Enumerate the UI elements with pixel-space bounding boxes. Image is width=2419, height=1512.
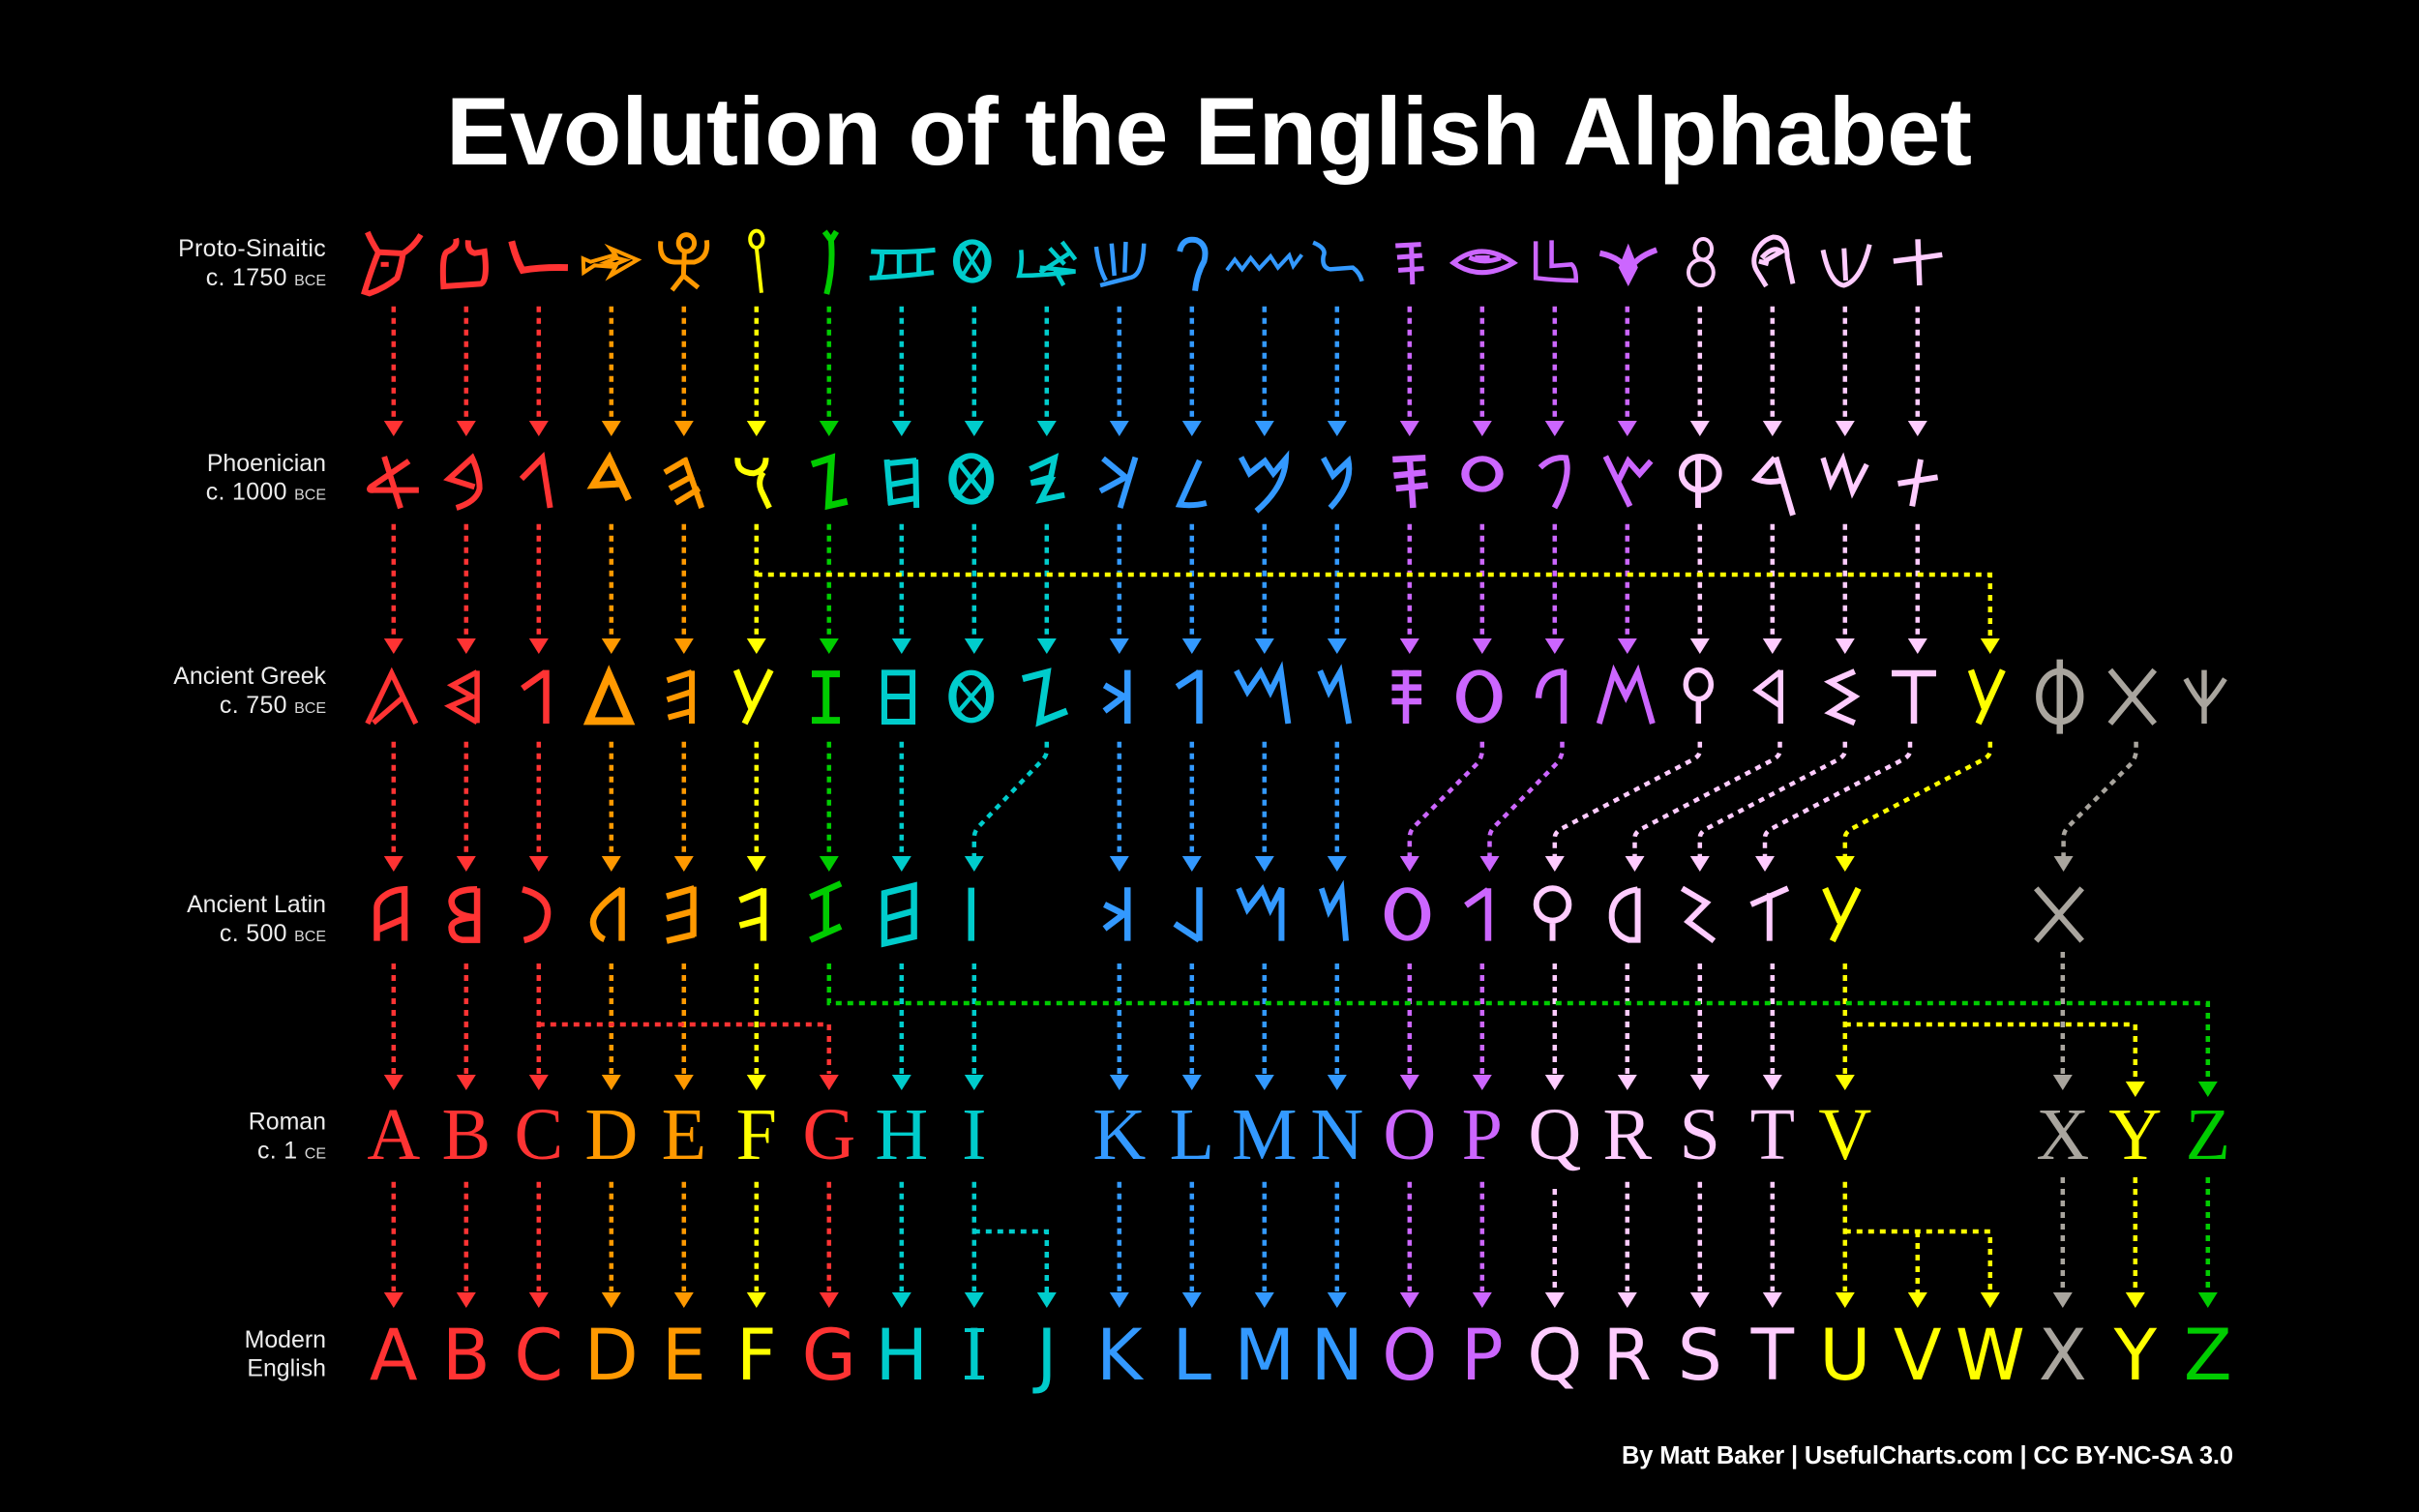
glyph: iota — [1023, 672, 1067, 722]
letter S: S — [1678, 1316, 1722, 1397]
letter H: H — [875, 1316, 928, 1397]
letter G: G — [802, 1316, 856, 1397]
arrow L — [1182, 1182, 1202, 1308]
arrow X — [2054, 742, 2136, 872]
label: Ancient Latin: Ancient Latin — [187, 891, 326, 918]
glyph: O — [1385, 887, 1430, 941]
glyph: cord — [1688, 239, 1714, 285]
letter I: I — [962, 1094, 986, 1175]
arrow C — [529, 1182, 549, 1308]
arrow Q — [1690, 524, 1710, 654]
arrows: Ancient Latin to Roman — [384, 952, 2218, 1097]
glyph: cross — [1894, 239, 1942, 285]
glyph: beta — [450, 670, 477, 723]
glyph: pe — [1540, 458, 1568, 508]
glyph: digamma — [736, 670, 771, 724]
glyph: delta — [589, 674, 629, 721]
arrow A — [384, 964, 403, 1090]
glyph: H — [884, 886, 914, 943]
glyph: R — [1612, 888, 1638, 940]
label: Ancient Latin: c. 500 BCE — [220, 920, 326, 947]
glyph: yodh — [1030, 458, 1064, 500]
arrow B — [457, 964, 476, 1090]
arrow X — [2053, 952, 2073, 1090]
label: Roman: c. 1 CE — [257, 1137, 326, 1164]
arrow T — [1763, 1182, 1782, 1308]
letter B: B — [441, 1094, 491, 1175]
title: Evolution of the English Alphabet — [446, 77, 1972, 185]
letter Z: Z — [2186, 1094, 2230, 1175]
glyph: Z — [810, 883, 841, 940]
arrow C with branch to G — [529, 964, 839, 1090]
arrows: Ancient Greek to Ancient Latin — [384, 742, 2136, 872]
glyph: N — [1322, 888, 1346, 941]
glyph: P — [1466, 888, 1488, 941]
arrow L — [1182, 524, 1202, 654]
letter R: R — [1603, 1316, 1652, 1397]
glyph: theta — [948, 670, 994, 723]
label: Phoenician: c. 1000 BCE — [206, 478, 326, 505]
label: Phoenician: Phoenician — [207, 450, 326, 477]
arrow P — [1473, 1182, 1492, 1308]
arrow yodh — [1037, 307, 1057, 436]
glyph: he — [665, 458, 702, 508]
glyph: weapon — [824, 231, 836, 294]
letter C: C — [514, 1316, 563, 1397]
arrow S — [1836, 524, 1855, 654]
arrow T — [1908, 524, 1927, 654]
letter V: V — [1894, 1316, 1942, 1397]
arrow A — [384, 524, 403, 654]
arrow P — [1480, 742, 1562, 872]
arrow S — [1690, 1182, 1710, 1308]
glyph: mem — [1241, 458, 1286, 511]
letter L: L — [1170, 1094, 1214, 1175]
letter J: J — [1032, 1316, 1058, 1397]
glyph: house — [443, 239, 486, 286]
glyph: beth — [449, 458, 480, 508]
glyph: X — [2036, 888, 2082, 941]
glyph: mu — [1237, 670, 1288, 724]
arrow H — [892, 964, 911, 1090]
glyph: plant — [1599, 244, 1657, 286]
letter Q: Q — [1527, 1316, 1582, 1397]
letter F: F — [736, 1316, 777, 1397]
arrow samekh — [1400, 524, 1419, 654]
letter N: N — [1310, 1094, 1363, 1175]
arrow T — [1755, 742, 1910, 872]
letter Q: Q — [1528, 1094, 1581, 1175]
arrow D — [602, 524, 621, 654]
glyph: chi — [2110, 670, 2155, 724]
arrow Z — [820, 742, 839, 872]
glyph: daleth — [593, 459, 629, 500]
arrow Q — [1545, 964, 1565, 1090]
glyph: samekh — [1392, 458, 1428, 508]
proto glyphs K to T — [1096, 237, 1942, 291]
arrow D — [602, 1182, 621, 1308]
label: Ancient Greek: c. 750 BCE — [220, 692, 326, 719]
arrow V with branch to Y — [1836, 964, 2145, 1097]
glyph: M — [1239, 888, 1281, 941]
arrow K — [1110, 1182, 1129, 1308]
arrow N — [1328, 964, 1347, 1090]
arrow A — [384, 1182, 403, 1308]
arrow I with branch to J — [965, 1182, 1057, 1308]
arrow P — [1545, 307, 1565, 436]
glyph: T — [1751, 888, 1788, 941]
arrow Y — [1836, 742, 1990, 872]
letter A: A — [370, 1316, 418, 1397]
arrow S — [1690, 742, 1845, 872]
arrow R — [1763, 524, 1782, 654]
letter F: F — [736, 1094, 777, 1175]
letter K: K — [1096, 1316, 1145, 1397]
arrow F — [747, 307, 766, 436]
glyph: I — [969, 888, 974, 941]
arrow I — [965, 964, 984, 1090]
arrow O — [1400, 964, 1419, 1090]
letter C: C — [514, 1094, 563, 1175]
glyph: kaph — [1100, 458, 1135, 508]
glyph: djed pillar — [1395, 245, 1424, 284]
glyph: aleph — [370, 457, 419, 508]
letter G: G — [802, 1094, 855, 1175]
row: Ancient Latin glyphs — [376, 883, 2082, 943]
row: Phoenician glyphs — [370, 453, 1938, 516]
row: Modern English letters — [370, 1316, 2232, 1397]
letter E: E — [662, 1316, 706, 1397]
arrow O — [1400, 1182, 1419, 1308]
glyph: phi — [2039, 660, 2080, 734]
glyph: S — [1682, 888, 1714, 941]
glyph: E — [667, 887, 695, 941]
glyph: corner — [1536, 240, 1576, 281]
letter S: S — [1680, 1094, 1720, 1175]
arrow L — [1182, 964, 1202, 1090]
arrow yodh — [1037, 524, 1057, 654]
arrow A — [384, 307, 403, 436]
arrow N — [1328, 742, 1347, 872]
letter Z: Z — [2184, 1316, 2232, 1397]
label: Modern English: English — [247, 1355, 326, 1382]
arrow V with branches to U, V, W — [1836, 1182, 2000, 1308]
glyph: tsade — [1605, 457, 1651, 506]
glyph: omicron — [1456, 669, 1502, 724]
glyph: xi — [1391, 670, 1421, 724]
letter E: E — [662, 1094, 706, 1175]
arrow E — [674, 307, 694, 436]
label: Roman: Roman — [249, 1108, 326, 1135]
glyph: sigma — [1831, 671, 1855, 723]
glyph: san — [1599, 672, 1653, 724]
phoenician glyphs A to J — [370, 453, 1064, 508]
arrow T — [1908, 307, 1927, 436]
glyph: D — [593, 888, 622, 941]
greek glyphs K to psi — [1105, 660, 2225, 734]
arrow tsade — [1618, 307, 1637, 436]
glyph: eta — [884, 672, 912, 722]
arrow B — [457, 742, 476, 872]
glyph: man — [661, 235, 707, 290]
arrow F — [747, 742, 766, 872]
arrow iota to I — [965, 742, 1047, 872]
arrow Z — [2198, 1177, 2218, 1308]
arrow N — [1328, 524, 1347, 654]
glyph: qoppa — [1686, 670, 1711, 724]
arrow B — [457, 524, 476, 654]
glyph: zayin — [812, 458, 848, 506]
glyph: ox head — [365, 232, 421, 293]
glyph: taw — [1898, 460, 1938, 506]
letter D: D — [584, 1094, 638, 1175]
arrow D — [602, 964, 621, 1090]
arrow G — [820, 524, 839, 654]
arrows: Phoenician to Ancient Greek — [384, 524, 2000, 654]
row: Roman letters — [367, 1094, 2230, 1175]
arrow teth — [965, 307, 984, 436]
arrow O — [1400, 742, 1482, 872]
glyph: water — [1227, 254, 1301, 270]
letter N: N — [1311, 1316, 1363, 1397]
arrows: Roman to Modern English — [384, 1177, 2218, 1308]
glyph: head — [1754, 237, 1793, 286]
glyph: C — [523, 889, 548, 940]
arrow Q — [1545, 742, 1700, 872]
arrow Q — [1545, 1189, 1565, 1308]
glyph: peg — [750, 231, 762, 293]
glyph: lamedh — [1180, 460, 1207, 505]
letter V: V — [1818, 1094, 1871, 1175]
letter O: O — [1382, 1316, 1437, 1397]
arrow S — [1836, 307, 1855, 436]
glyph: bow — [1823, 245, 1869, 285]
glyph: resh — [1756, 458, 1793, 516]
glyph: shin — [1823, 458, 1867, 491]
letter A: A — [367, 1094, 420, 1175]
arrow E — [674, 964, 694, 1090]
glyph: qoph — [1682, 457, 1719, 508]
arrow S — [1690, 964, 1710, 1090]
label: Modern English: Modern — [245, 1326, 326, 1353]
arrow Y — [2126, 1177, 2145, 1308]
greek glyphs A to Z — [368, 670, 1067, 724]
arrow A — [384, 742, 403, 872]
glyph: F — [739, 888, 763, 941]
glyph: fence — [870, 250, 936, 278]
glyph: gimel — [522, 458, 551, 508]
letter I with serifs: I — [964, 1316, 985, 1397]
arrow C — [529, 524, 549, 654]
proto glyphs A to J — [365, 231, 1075, 294]
arrow Q — [1690, 307, 1710, 436]
arrow B — [457, 307, 476, 436]
glyph: psi — [2186, 670, 2225, 724]
arrow C — [529, 307, 549, 436]
glyph: nun — [1324, 458, 1349, 508]
label: Proto-Sinaitic: Proto-Sinaitic — [178, 235, 326, 262]
label: Ancient Greek: Ancient Greek — [173, 663, 327, 690]
label: Proto-Sinaitic: c. 1750 BCE — [206, 264, 326, 291]
arrow R — [1618, 964, 1637, 1090]
glyph: tau — [1892, 673, 1936, 724]
letter Y: Y — [2108, 1094, 2162, 1175]
arrow latin Z to roman Z — [829, 964, 2218, 1097]
arrow E — [674, 524, 694, 654]
arrow D — [602, 742, 621, 872]
arrow R — [1618, 1182, 1637, 1308]
arrow N — [1328, 307, 1347, 436]
glyph: B — [452, 888, 477, 940]
letter X: X — [2036, 1094, 2089, 1175]
arrow R — [1626, 742, 1780, 872]
arrow samekh — [1400, 307, 1419, 436]
arrow teth — [965, 524, 984, 654]
arrow tsade — [1618, 524, 1637, 654]
arrow K — [1110, 964, 1129, 1090]
arrow G — [820, 307, 839, 436]
arrow K — [1110, 524, 1129, 654]
letter X: X — [2039, 1316, 2087, 1397]
row: Proto-Sinaitic glyphs — [365, 231, 1942, 294]
letter T: T — [1750, 1316, 1795, 1397]
arrow M — [1255, 307, 1274, 436]
credit line: By Matt Baker | UsefulCharts.com | CC BY-NC-SA 3.0 — [1622, 1442, 2233, 1469]
glyph: hand arm — [1019, 242, 1075, 285]
letter R: R — [1602, 1094, 1652, 1175]
glyph: kappa — [1105, 670, 1127, 724]
arrow X — [2053, 1177, 2073, 1308]
arrow P — [1473, 964, 1492, 1090]
arrow G — [820, 1182, 839, 1308]
phoenician glyphs K to T — [1100, 456, 1938, 516]
arrow L — [1182, 307, 1202, 436]
glyph: epsilon — [667, 670, 692, 724]
arrow F — [747, 1182, 766, 1308]
arrow C — [529, 742, 549, 872]
glyph: wheel — [953, 239, 992, 283]
arrow M — [1255, 1182, 1274, 1308]
glyph: goad — [1180, 240, 1206, 291]
arrow P — [1545, 524, 1565, 654]
latin glyphs K to X — [1105, 887, 2082, 941]
arrow H — [892, 1182, 911, 1308]
glyph: Q — [1537, 888, 1568, 941]
arrow K — [1110, 742, 1129, 872]
arrow O — [1473, 524, 1492, 654]
glyph: A — [376, 889, 404, 941]
glyph: L — [1175, 887, 1199, 941]
arrow E — [674, 1182, 694, 1308]
letter H: H — [875, 1094, 928, 1175]
arrows: Proto-Sinaitic to Phoenician — [384, 307, 1927, 436]
glyph: ayin — [1461, 456, 1504, 492]
glyph: Y — [1825, 888, 1859, 941]
glyph: palm — [1096, 242, 1144, 285]
letter U: U — [1819, 1316, 1870, 1397]
letter P: P — [1462, 1094, 1503, 1175]
arrow K — [1110, 307, 1129, 436]
letter T: T — [1750, 1094, 1795, 1175]
arrow H — [892, 307, 911, 436]
arrow B — [457, 1182, 476, 1308]
glyph: heth — [886, 460, 917, 508]
letter M: M — [1232, 1094, 1298, 1175]
arrow R — [1763, 307, 1782, 436]
letter P: P — [1461, 1316, 1504, 1397]
glyph: waw — [737, 458, 769, 508]
glyph: throwstick — [512, 241, 568, 270]
glyph: nu — [1320, 670, 1349, 724]
latin glyphs A to I — [376, 883, 971, 943]
letter K: K — [1092, 1094, 1146, 1175]
letter D: D — [584, 1316, 639, 1397]
glyph: teth — [948, 453, 994, 505]
arrow D — [602, 307, 621, 436]
glyph: eye — [1453, 252, 1513, 273]
glyph: gamma — [523, 670, 546, 724]
letter W: W — [1956, 1316, 2025, 1397]
arrow N — [1328, 1182, 1347, 1308]
glyph: K — [1105, 887, 1127, 941]
arrow H — [892, 742, 911, 872]
glyph: rho — [1757, 670, 1780, 724]
glyph: zeta — [812, 674, 840, 721]
letter M: M — [1234, 1316, 1295, 1397]
glyph: fish — [583, 249, 638, 276]
letter Y: Y — [2113, 1316, 2158, 1397]
arrow M — [1255, 964, 1274, 1090]
letter B: B — [442, 1316, 491, 1397]
letter O: O — [1383, 1094, 1436, 1175]
arrow M — [1255, 524, 1274, 654]
arrow F with branch to upsilon — [747, 524, 2000, 654]
glyph: pi — [1538, 670, 1564, 724]
arrow H — [892, 524, 911, 654]
glyph: lambda — [1178, 670, 1199, 724]
letter L: L — [1173, 1316, 1212, 1397]
arrow M — [1255, 742, 1274, 872]
arrow L — [1182, 742, 1202, 872]
glyph: alpha — [368, 673, 416, 724]
glyph: upsilon — [1971, 670, 2003, 724]
arrow E — [674, 742, 694, 872]
arrow F — [747, 964, 766, 1090]
arrow O — [1473, 307, 1492, 436]
glyph: snake — [1313, 243, 1362, 282]
row labels — [173, 235, 327, 1382]
arrow T — [1763, 964, 1782, 1090]
row: Ancient Greek glyphs — [368, 660, 2225, 734]
